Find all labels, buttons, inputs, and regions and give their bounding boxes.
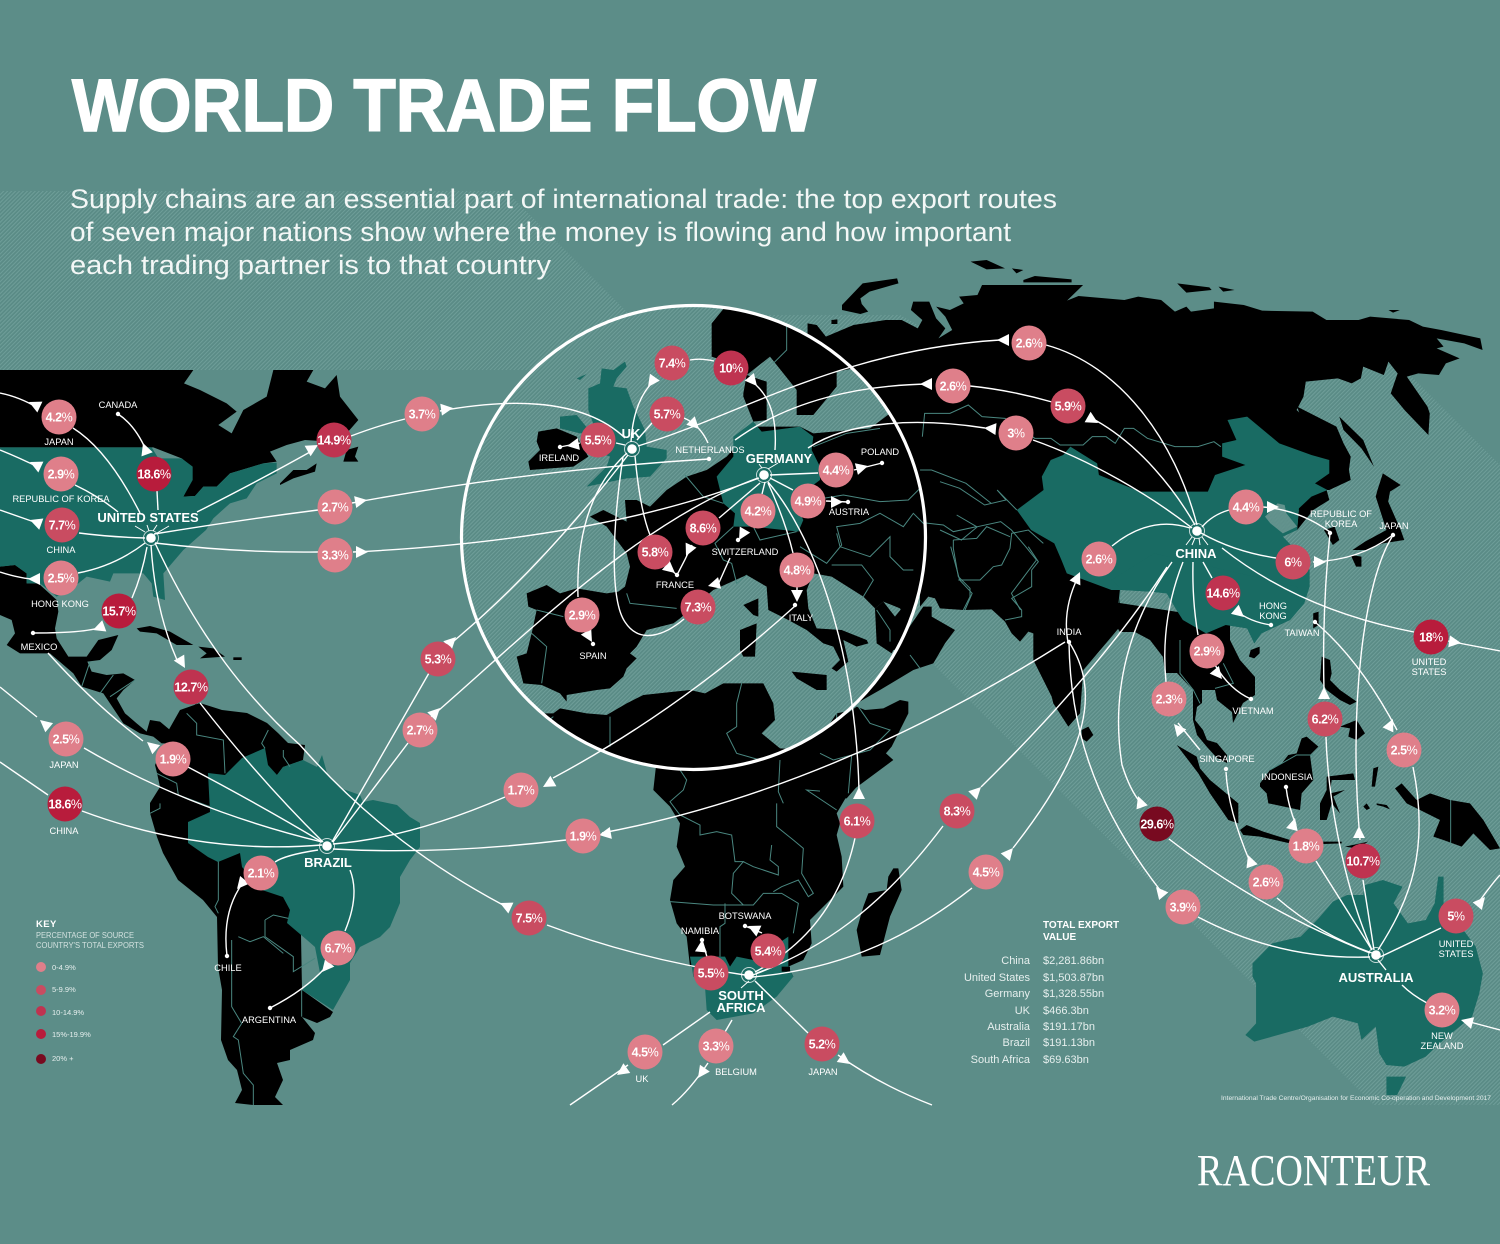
bubble 12.7%: 12.7% (174, 680, 208, 694)
routes: South Africa (155, 543, 932, 1105)
bubble 4.4% (818, 452, 854, 488)
bubble 4.4% (1228, 490, 1264, 524)
source country labels: CHINA (1175, 546, 1217, 561)
bubble 2.7%: 2.7% (407, 724, 434, 738)
destination labels: SINGAPORE (1199, 754, 1255, 764)
total export value table: TOTAL EXPORT (1043, 920, 1119, 931)
destination labels: CHINA (47, 545, 76, 555)
bubble 2.5%: 2.5% (53, 732, 80, 746)
source country labels: GERMANY (746, 451, 813, 466)
bubble 1.9% (156, 742, 190, 776)
bubble 2.6%: 2.6% (1016, 336, 1043, 350)
Russia and north Asia land (808, 260, 1483, 510)
destination labels: REPUBLIC OF KOREA (12, 494, 110, 504)
bubble 2.6%: 2.6% (940, 380, 967, 394)
bubble 3.3% (318, 538, 352, 572)
bubble 3.3% (698, 1028, 734, 1064)
bubble 2.5%: 2.5% (1391, 744, 1418, 758)
bubble 2.9% (564, 598, 600, 632)
destination labels: CHINA (50, 826, 79, 836)
destination labels: VIETNAM (1232, 706, 1274, 716)
source country labels: UNITED STATES (97, 510, 199, 525)
bubble 4.5%: 4.5% (973, 866, 1000, 880)
Ireland (528, 428, 588, 470)
key: 0-4.9% (52, 963, 76, 972)
bubble 5.5%: 5.5% (698, 966, 725, 980)
hub: UK (624, 442, 640, 456)
total export value table: China (1001, 955, 1031, 967)
bubble 5.7%: 5.7% (654, 408, 681, 422)
China (1017, 417, 1329, 643)
destination labels: UNITED (1439, 939, 1474, 949)
bubble 10.7% (1346, 844, 1380, 878)
total export value table: Brazil (1002, 1037, 1030, 1049)
routes: United States (0, 393, 759, 671)
bubble 18%: 18% (1419, 630, 1443, 644)
bubble 2.5%: 2.5% (48, 572, 75, 586)
hub: Australia (1368, 948, 1384, 962)
bubble 5.2%: 5.2% (809, 1038, 836, 1052)
bubble 18% (1414, 620, 1448, 654)
source country labels: AUSTRALIA (1338, 970, 1414, 985)
bubble 6.2% (1308, 702, 1342, 736)
bubble 3.9%: 3.9% (1170, 900, 1197, 914)
bubble 6% (1276, 544, 1310, 580)
bubble 1.8% (1288, 828, 1324, 864)
bubble 10% (714, 350, 748, 386)
destination labels: UNITED (1412, 657, 1447, 667)
bubble 7.5% (512, 900, 546, 936)
bubble 5.4% (750, 934, 786, 968)
hub: Germany (756, 468, 772, 482)
total export value table: South Africa (971, 1054, 1031, 1066)
bubble 2.9% (1190, 634, 1224, 668)
hub: South Africa (742, 968, 756, 982)
source note: International Trade Centre/Organisation for Economic Co-operation and Development 2017 (1221, 1096, 1492, 1102)
key: 20% + (52, 1054, 74, 1063)
destination labels: STATES (1412, 667, 1446, 677)
destination labels: ARGENTINA (242, 1015, 297, 1025)
total export value table: $1,328.55bn (1043, 988, 1104, 1000)
key: COUNTRY'S TOTAL EXPORTS (36, 941, 144, 950)
routes: India, Australia and islands (753, 533, 1500, 1030)
bubble 6.1%: 6.1% (844, 814, 871, 828)
bubble 2.6%: 2.6% (1086, 552, 1113, 566)
percentage bubbles (42, 326, 1474, 1070)
bubble 2.6% (936, 368, 970, 404)
South America borders (150, 713, 315, 972)
destination labels: CANADA (99, 400, 138, 410)
title: WORLD TRADE FLOW (72, 64, 816, 147)
bubble 5.5% (580, 422, 616, 458)
North America land (0, 370, 358, 743)
bubble 5.3% (420, 642, 456, 676)
destination labels: JAPAN (808, 1067, 838, 1077)
bubble 7.3% (680, 590, 716, 624)
hub: United States (144, 530, 158, 546)
bubble 2.9% (44, 456, 78, 492)
bubble 14.9%: 14.9% (317, 434, 351, 448)
bubble 3.7%: 3.7% (409, 408, 436, 422)
bubble 2.9%: 2.9% (569, 608, 596, 622)
hatched sea band (0, 191, 1500, 1105)
bubble 14.9% (316, 422, 352, 458)
destination labels: AUSTRIA (829, 507, 870, 517)
bubble 18.6%: 18.6% (48, 798, 82, 812)
bubble 1.7%: 1.7% (508, 784, 535, 798)
bubble 15.7% (102, 594, 136, 628)
bubble 7.5%: 7.5% (516, 912, 543, 926)
bubble 5.9%: 5.9% (1055, 400, 1082, 414)
bubble 2.7% (318, 490, 352, 524)
Germany (717, 422, 820, 532)
destination labels: UK (636, 1074, 649, 1084)
world map outside the magnifier (0, 260, 1500, 1105)
bubble 4.5%: 4.5% (632, 1046, 659, 1060)
bubble 5.9% (1050, 388, 1086, 424)
bubble 8.6%: 8.6% (690, 522, 717, 536)
bubble 3% (998, 416, 1034, 450)
subtitle: Supply chains are an essential part of international trade: the top export routes (70, 184, 1057, 214)
destination labels: NETHERLANDS (675, 445, 745, 455)
destination labels: NEW (1431, 1031, 1453, 1041)
key: 15%-19.9% (52, 1030, 91, 1039)
bubble 5.5%: 5.5% (585, 434, 612, 448)
bubble 2.6% (1012, 326, 1046, 360)
bubble 1.9% (566, 818, 600, 854)
bubble 10.7%: 10.7% (1346, 854, 1380, 868)
source country labels (97, 426, 1414, 1015)
bubble 2.1% (244, 856, 278, 890)
Indonesia, Philippines, New Guinea (1177, 640, 1500, 850)
bubble 2.5% (1386, 732, 1422, 768)
bubble 4.8% (780, 552, 814, 588)
bubble 2.3% (1152, 682, 1186, 716)
hub: China (1190, 524, 1204, 538)
destination labels: TAIWAN (1284, 628, 1320, 638)
East Asia coast, China and islands (940, 407, 1404, 687)
bubble 3.2%: 3.2% (1429, 1004, 1456, 1018)
northern Europe land (712, 309, 850, 415)
total export value table: $191.13bn (1043, 1037, 1095, 1049)
destination labels: JAPAN (44, 437, 74, 447)
total export value table: VALUE (1043, 932, 1076, 943)
destination labels: REPUBLIC OF (1310, 509, 1372, 519)
total export value table: UK (1015, 1005, 1031, 1017)
bubble 1.7% (504, 772, 538, 808)
destination labels: SPAIN (579, 651, 607, 661)
subtitle: of seven major nations show where the money is flowing and how important (70, 217, 1012, 247)
bubble 7.7% (44, 508, 80, 542)
bubble 2.7%: 2.7% (322, 500, 349, 514)
bubble 6.7%: 6.7% (325, 942, 352, 956)
destination labels: KOREA (1325, 519, 1358, 529)
bubble 5.4%: 5.4% (755, 944, 782, 958)
bubble 5% (1438, 898, 1474, 934)
bubble 2.6% (1248, 864, 1284, 900)
key (36, 919, 144, 1064)
bubble 2.9%: 2.9% (1194, 644, 1221, 658)
bubble 2.3%: 2.3% (1156, 692, 1183, 706)
Raconteur logo: RACONTEUR (1197, 1146, 1431, 1195)
destination labels: SWITZERLAND (712, 547, 779, 557)
bubble 4.8%: 4.8% (784, 564, 811, 578)
Southeast Asia mainland (1100, 600, 1255, 763)
total export value table: United States (964, 972, 1030, 984)
bubble 18.6%: 18.6% (137, 468, 171, 482)
continental Europe land (517, 413, 940, 702)
China south edge over Southeast Asia (1111, 553, 1304, 643)
destination labels: JAPAN (49, 760, 79, 770)
bubble 7.4%: 7.4% (659, 356, 686, 370)
bubble 2.9%: 2.9% (48, 468, 75, 482)
bubble 8.3%: 8.3% (944, 804, 971, 818)
bubble 3%: 3% (1007, 426, 1025, 440)
magnifier ring (462, 306, 926, 770)
bubble 1.9%: 1.9% (570, 830, 597, 844)
routes: Brazil (0, 455, 1065, 1010)
bubble 18.6% (136, 456, 172, 492)
destination labels: INDIA (1057, 627, 1082, 637)
total export value table: $1,503.87bn (1043, 972, 1104, 984)
destination labels: INDONESIA (1261, 772, 1313, 782)
bubble 4.9%: 4.9% (795, 494, 822, 508)
Africa land (653, 700, 902, 1020)
key: PERCENTAGE OF SOURCE (36, 931, 134, 940)
bubble 2.5% (48, 722, 84, 756)
bubble 4.5% (628, 1034, 662, 1070)
bubble 5.3%: 5.3% (425, 652, 452, 666)
bubble 4.2%: 4.2% (46, 410, 73, 424)
destination labels: STATES (1439, 949, 1473, 959)
destination labels: IRELAND (539, 453, 579, 463)
total export value table: $191.17bn (1043, 1021, 1095, 1033)
bubble 6.1% (840, 804, 874, 838)
bubble 8.6% (686, 510, 720, 546)
bubble 2.6% (1082, 542, 1116, 576)
subtitle: each trading partner is to that country (70, 250, 552, 280)
bubble 3.7% (404, 396, 440, 432)
bubble 2.5% (44, 560, 78, 596)
bubble 3.2% (1424, 992, 1460, 1028)
bubble 1.8%: 1.8% (1293, 840, 1320, 854)
subtitle (70, 184, 1057, 280)
source country labels: BRAZIL (304, 855, 352, 870)
bubble 29.6%: 29.6% (1140, 818, 1174, 832)
UK (587, 362, 667, 487)
bubble 4.2%: 4.2% (745, 504, 772, 518)
bubble 29.6% (1140, 806, 1174, 842)
bubble 18.6% (48, 786, 82, 822)
bubble 2.6%: 2.6% (1253, 876, 1280, 890)
routes: China (753, 345, 1500, 975)
bubble 4.9% (790, 484, 826, 518)
bubble 4.5% (968, 854, 1004, 890)
bubble 14.6%: 14.6% (1206, 586, 1240, 600)
key: KEY (36, 919, 57, 930)
bubble 4.4%: 4.4% (823, 464, 850, 478)
bubble 7.3%: 7.3% (685, 600, 712, 614)
South America land (150, 703, 333, 1105)
routes: Germany and UK (558, 334, 1009, 972)
hub: Brazil (320, 838, 334, 854)
bubble 5.8%: 5.8% (642, 546, 669, 560)
bubble 4.4%: 4.4% (1233, 500, 1260, 514)
destination labels: KONG (1259, 611, 1287, 621)
destination labels: BELGIUM (715, 1067, 757, 1077)
bubble 1.9%: 1.9% (160, 752, 187, 766)
total export value table (964, 920, 1119, 1066)
Arabia, Iran, India land (820, 500, 1120, 798)
destination labels: HONG (1259, 601, 1287, 611)
bubble 10%: 10% (719, 362, 743, 376)
bubble 3.3%: 3.3% (703, 1040, 730, 1054)
destination labels: BOTSWANA (719, 911, 772, 921)
source country labels: UK (622, 426, 641, 441)
total export value table: $466.3bn (1043, 1005, 1089, 1017)
destination labels: ZEALAND (1421, 1041, 1464, 1051)
bubble 8.3% (940, 794, 974, 828)
destination labels: MEXICO (21, 642, 57, 652)
total export value table: Australia (987, 1021, 1031, 1033)
bubble 3.3%: 3.3% (322, 548, 349, 562)
bubble 12.7% (174, 670, 208, 704)
bubble 5%: 5% (1447, 910, 1465, 924)
bubble 6.2%: 6.2% (1312, 712, 1339, 726)
bubble 5.7% (650, 396, 684, 432)
key: 5-9.9% (52, 985, 76, 994)
key: 10-14.9% (52, 1008, 84, 1017)
bubble 3.9% (1166, 890, 1200, 924)
total export value table: $69.63bn (1043, 1054, 1089, 1066)
source country labels: SOUTH (718, 988, 764, 1003)
bubble 2.1%: 2.1% (248, 866, 275, 880)
bubble 5.2% (804, 1026, 840, 1062)
magnified Europe circle (462, 305, 940, 780)
destination labels: FRANCE (656, 580, 694, 590)
bubble 2.7% (402, 712, 438, 748)
bubble 15.7%: 15.7% (102, 604, 136, 618)
bubble 5.8% (638, 534, 672, 570)
destination labels: ITALY (789, 613, 813, 623)
destination labels (12, 400, 1474, 1084)
bubble 7.7%: 7.7% (49, 518, 76, 532)
bubble 7.4% (654, 346, 690, 380)
source country labels: AFRICA (716, 1000, 766, 1015)
destination labels: POLAND (861, 447, 899, 457)
bubble 5.5% (694, 956, 728, 990)
Brazil (188, 748, 420, 1010)
destination labels: CHILE (214, 963, 242, 973)
bubble 14.6% (1206, 576, 1240, 610)
Australia (1245, 877, 1483, 1095)
total export value table: $2,281.86bn (1043, 955, 1104, 967)
destination labels: NAMIBIA (681, 926, 720, 936)
North Africa land (544, 683, 844, 768)
bubble 6.7% (320, 930, 356, 966)
destination labels: HONG KONG (31, 599, 89, 609)
hub spokes near source labels (135, 463, 1208, 988)
destination labels: JAPAN (1379, 521, 1409, 531)
bubble 6%: 6% (1284, 556, 1302, 570)
bubble 4.2% (42, 400, 76, 434)
Balkans and Turkey land (875, 602, 908, 654)
total export value table: Germany (985, 988, 1030, 1000)
bubble 4.2% (740, 494, 776, 528)
